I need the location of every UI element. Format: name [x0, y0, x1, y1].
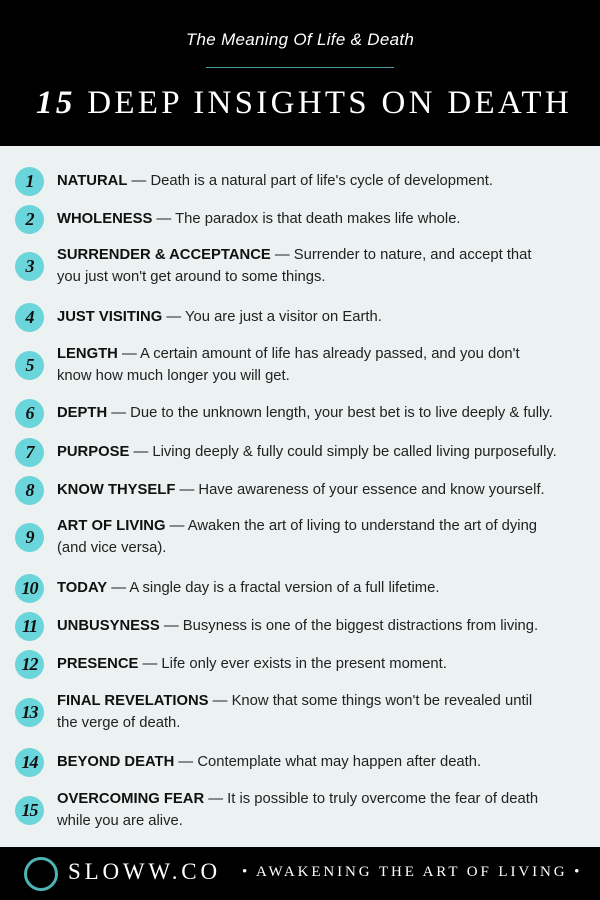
item 12	[15, 650, 447, 679]
item 3: 3	[26, 256, 34, 276]
item 9: 9	[26, 527, 34, 547]
list of insights: (and vice versa).	[57, 540, 166, 556]
brand: SLOWW.CO	[68, 859, 221, 884]
list of insights	[15, 167, 557, 829]
list of insights: ART OF LIVING — Awaken the art of living to understand the art of dying	[57, 518, 537, 534]
list of insights: the verge of death.	[57, 715, 180, 731]
item 5	[15, 346, 520, 384]
header	[0, 0, 600, 146]
item 4: 4	[26, 307, 34, 327]
item 5: 5	[26, 355, 34, 375]
item 3	[15, 247, 532, 285]
icon: ring logo	[24, 857, 58, 891]
item 13	[15, 693, 532, 731]
item 2	[15, 205, 461, 234]
item 1: 1	[26, 171, 34, 191]
item 11	[15, 612, 538, 641]
item 12: PRESENCE — Life only ever exists in the present moment.	[57, 656, 447, 672]
item 10	[15, 574, 439, 603]
item 11: UNBUSYNESS — Busyness is one of the biggest distractions from living.	[57, 618, 538, 634]
item 7: PURPOSE — Living deeply & fully could simply be called living purposefully.	[57, 444, 557, 460]
list of insights: while you are alive.	[57, 813, 183, 829]
list of insights: OVERCOMING FEAR — It is possible to truly overcome the fear of death	[57, 791, 538, 807]
footer	[0, 847, 600, 900]
item 1	[15, 167, 493, 196]
item 15: 15	[22, 800, 38, 820]
title: 15 DEEP INSIGHTS ON DEATH	[36, 85, 572, 121]
item 6: DEPTH — Due to the unknown length, your best bet is to live deeply & fully.	[57, 405, 553, 421]
item 11: 11	[22, 616, 37, 636]
subtitle: The Meaning Of Life & Death	[186, 30, 414, 49]
item 6: 6	[26, 403, 34, 423]
list of insights: you just won't get around to some things.	[57, 269, 326, 285]
item 9	[15, 518, 537, 556]
item 7: 7	[26, 442, 34, 462]
item 14: BEYOND DEATH — Contemplate what may happen after death.	[57, 754, 481, 770]
item 10: TODAY — A single day is a fractal version of a full lifetime.	[57, 580, 439, 596]
item 8	[15, 476, 545, 505]
item 4: JUST VISITING — You are just a visitor on Earth.	[57, 309, 382, 325]
item 15	[15, 791, 538, 829]
item 8: 8	[26, 480, 34, 500]
item 7	[15, 438, 557, 467]
tagline: • AWAKENING THE ART OF LIVING •	[242, 864, 582, 880]
item 14	[15, 748, 481, 777]
item 4	[15, 303, 382, 332]
item 1: NATURAL — Death is a natural part of life's cycle of development.	[57, 173, 493, 189]
item 14: 14	[22, 752, 38, 772]
item 12: 12	[22, 654, 38, 674]
item 6	[15, 399, 553, 428]
item 10: 10	[22, 578, 38, 598]
item 2: 2	[26, 209, 34, 229]
item 2: WHOLENESS — The paradox is that death makes life whole.	[57, 211, 461, 227]
item 13: 13	[22, 702, 38, 722]
item 8: KNOW THYSELF — Have awareness of your essence and know yourself.	[57, 482, 545, 498]
list of insights: know how much longer you will get.	[57, 368, 290, 384]
list of insights: SURRENDER & ACCEPTANCE — Surrender to nature, and accept that	[57, 247, 532, 263]
list of insights: LENGTH — A certain amount of life has already passed, and you don't	[57, 346, 520, 362]
list of insights: FINAL REVELATIONS — Know that some things won't be revealed until	[57, 693, 532, 709]
